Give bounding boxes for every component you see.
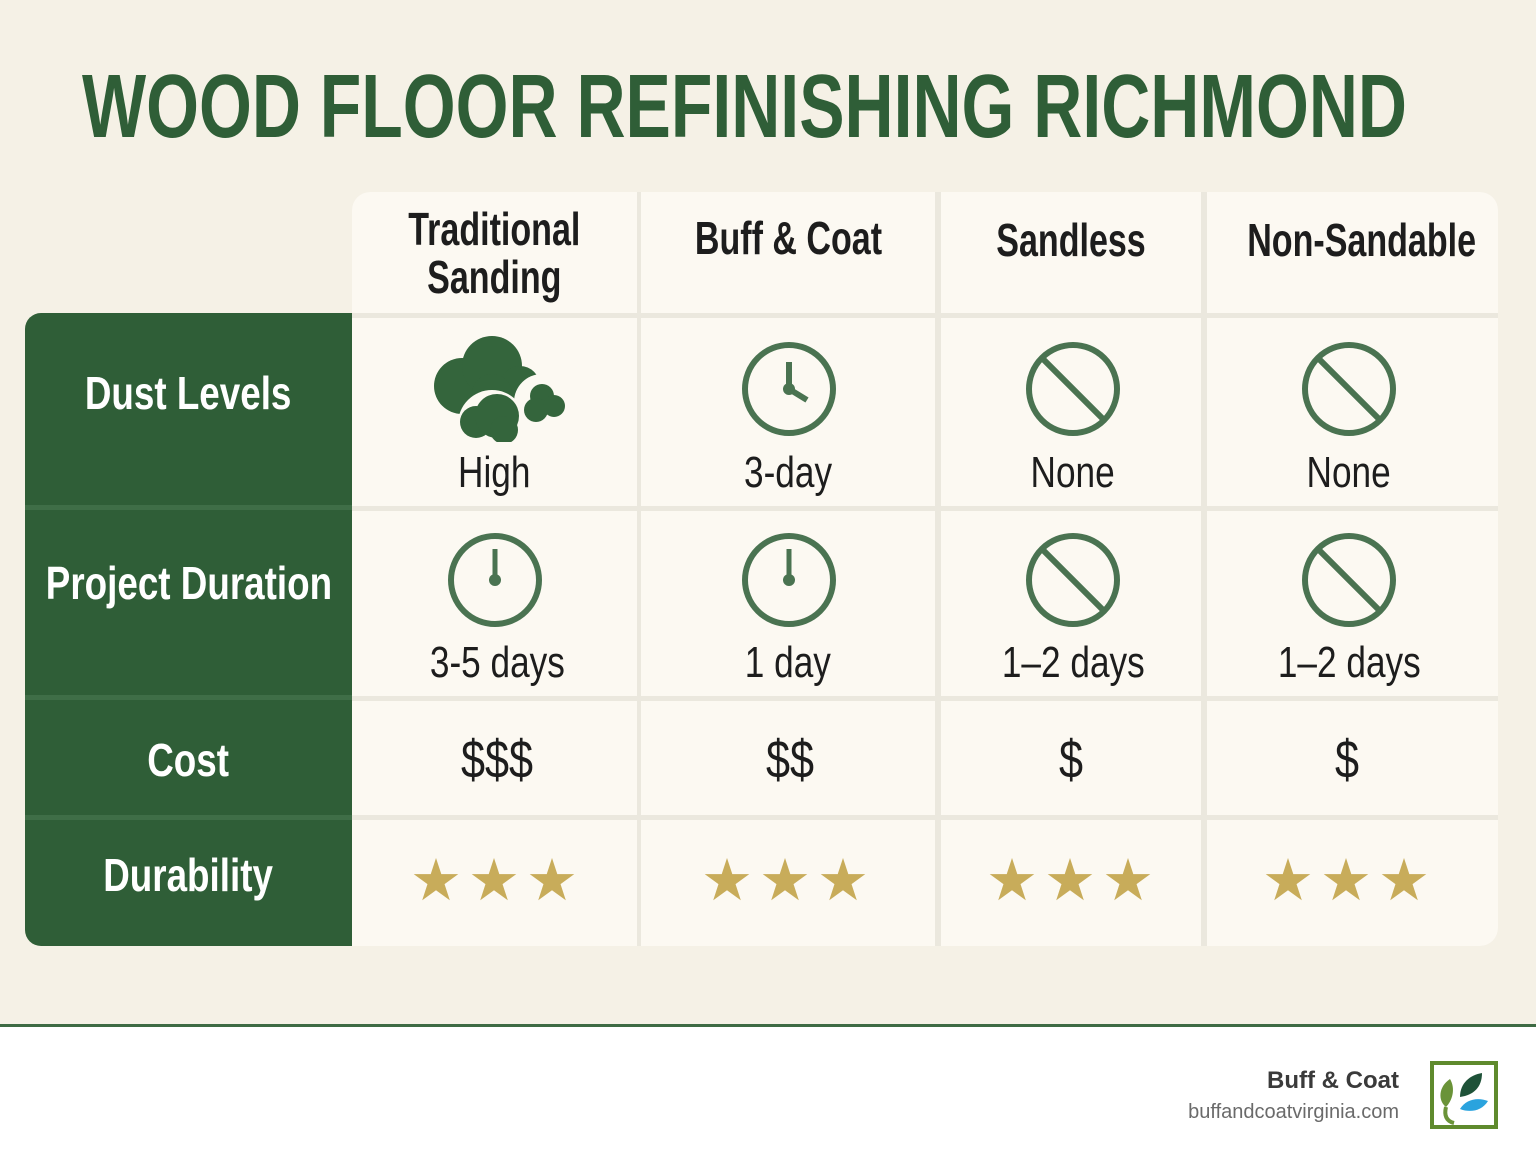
icon: dust clouds <box>434 336 565 442</box>
table: Sandless <box>996 214 1146 266</box>
text: $ <box>1335 730 1359 790</box>
table <box>25 192 1498 946</box>
website: buffandcoatvirginia.com <box>1188 1101 1399 1123</box>
table: Non-Sandable <box>1247 214 1476 266</box>
durability stars: ★★★ <box>410 848 584 913</box>
header cells <box>352 192 637 313</box>
text: None <box>1031 448 1115 497</box>
icon: timer 1 day <box>742 533 836 627</box>
brand name: Buff & Coat <box>1267 1067 1399 1094</box>
cost values: $$$ <box>461 730 533 790</box>
label: Durability: Durability <box>104 849 273 901</box>
icon: clock 3-day <box>742 342 836 436</box>
icon: timer 3-5 days <box>448 533 542 627</box>
header cells: Sanding <box>427 250 562 302</box>
header cells: Traditional <box>408 202 581 254</box>
icon: no sign nonsandable duration <box>1302 533 1396 627</box>
label: Project Duration: Project Duration <box>45 557 332 609</box>
text: 1–2 days <box>1002 638 1144 687</box>
text: 1–2 days <box>1278 638 1420 687</box>
text: $$ <box>766 730 814 790</box>
label: Cost: Cost <box>148 734 229 786</box>
logo <box>1430 1061 1498 1129</box>
text: 3-day <box>744 448 832 497</box>
icon: no nonsandable dust <box>1302 342 1396 436</box>
text: ★★★ <box>986 848 1160 913</box>
table background <box>352 192 1498 946</box>
text: ★★★ <box>1262 848 1436 913</box>
table: Buff & Coat <box>694 212 882 264</box>
icon: no sign sandless duration <box>1026 533 1120 627</box>
dust values: High <box>458 448 531 497</box>
icon: no sandless dust <box>1026 342 1120 436</box>
label: Dust Levels: Dust Levels <box>85 367 292 419</box>
row cells <box>352 318 637 506</box>
footer <box>0 1024 1536 1154</box>
row labels panel <box>25 313 352 946</box>
title: WOOD FLOOR REFINISHING RICHMOND <box>82 57 1407 157</box>
text: None <box>1307 448 1391 497</box>
duration values: 3-5 days <box>429 638 564 687</box>
text: $ <box>1059 730 1083 790</box>
text: ★★★ <box>701 848 875 913</box>
text: 1 day <box>745 638 831 687</box>
